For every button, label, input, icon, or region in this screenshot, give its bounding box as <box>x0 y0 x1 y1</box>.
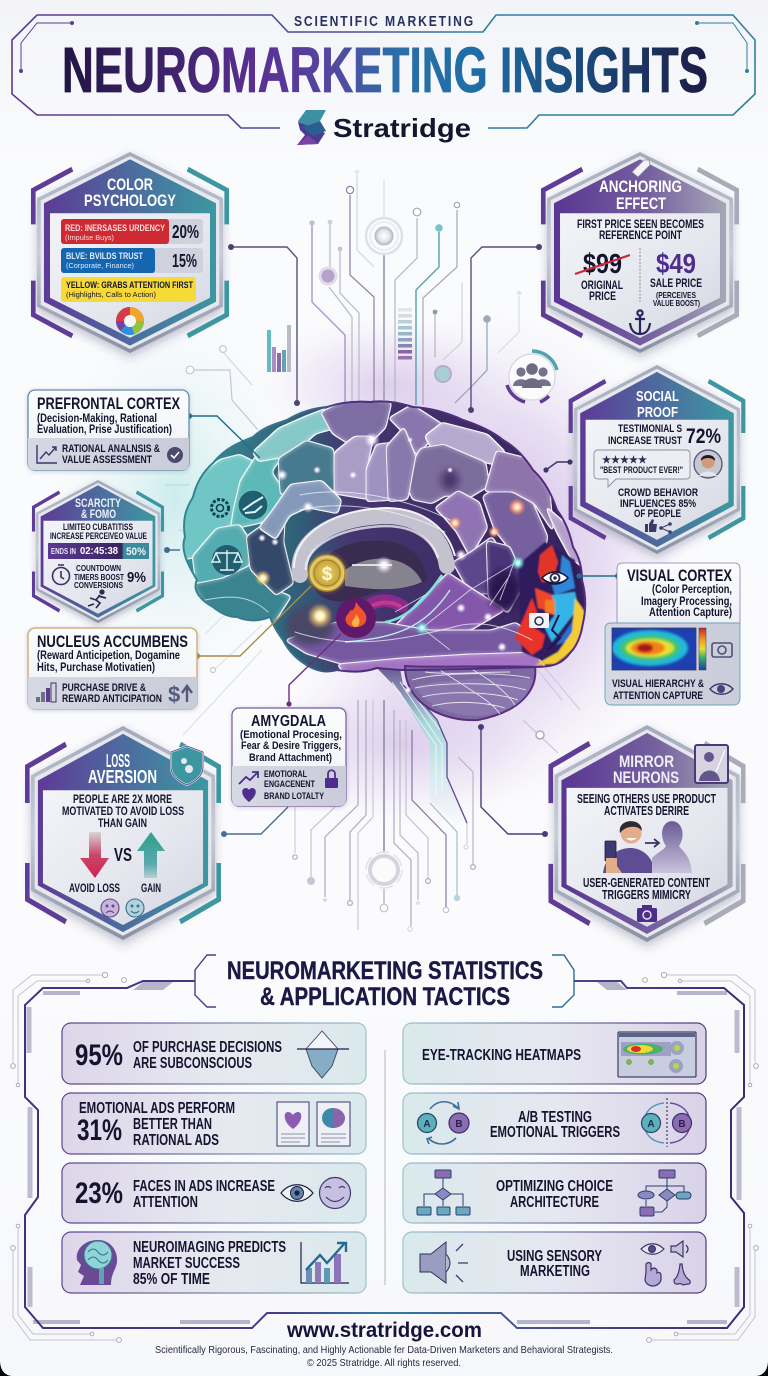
description: (Color Perception, <box>652 584 732 596</box>
eyebrow: SCIENTIFIC MARKETING <box>294 14 475 30</box>
summary: LIMITEO CUBATITISS <box>63 522 133 532</box>
row: 95 percent <box>62 1023 366 1084</box>
stat: blue: BLVE: BVILDS TRUST <box>66 251 143 262</box>
row: choice architecture <box>403 1163 706 1223</box>
stat: testimonials: TESTIMONIAL S <box>618 423 682 435</box>
icon: shield <box>171 746 203 785</box>
panel: prefrontal cortex <box>28 390 189 470</box>
icon: camera <box>529 613 549 628</box>
icon: check <box>167 447 183 463</box>
icon: a/b split: A <box>647 1119 655 1130</box>
stat: 9 percent: 9% <box>127 569 146 586</box>
heading: NEURONS <box>613 768 679 787</box>
icon: head with brain <box>77 1240 117 1285</box>
corpus callosum <box>294 508 455 601</box>
heading: PSYCHOLOGY <box>84 191 177 210</box>
icon: dollar up: $ <box>168 682 180 707</box>
logo: Stratridge <box>333 113 471 143</box>
row: a/b testing: A/B TESTING <box>518 1109 592 1126</box>
row: choice architecture: OPTIMIZING CHOICE <box>496 1178 613 1195</box>
brain folds and lobes <box>178 398 588 678</box>
row: sensory marketing: USING SENSORY <box>507 1248 602 1265</box>
summary lower: TRIGGERS MIMICRY <box>602 888 691 902</box>
summary: MOTIVATED TO AVOID LOSS <box>62 804 184 818</box>
summary <box>50 522 147 541</box>
band label: RATIONAL ANALNSIS & <box>62 443 160 455</box>
dark sulcus glows <box>286 470 520 645</box>
stat: red: 20% <box>172 222 199 242</box>
central glow <box>50 310 690 825</box>
panel: color psychology <box>33 152 227 353</box>
icon: handshake <box>238 490 268 520</box>
icon: price tag <box>632 160 650 177</box>
row: 23 percent: ATTENTION <box>133 1194 198 1211</box>
icon: camera lens <box>712 643 732 657</box>
heading: PROOF <box>637 405 678 421</box>
band label <box>62 443 160 466</box>
band label: EMOTIORAL <box>264 769 307 780</box>
band label <box>62 682 162 705</box>
stat: yellow: (Highlights, Calls to Action) <box>66 290 156 299</box>
connector: visual cortex <box>576 573 621 579</box>
connector: anchoring effect <box>468 244 542 413</box>
description <box>240 729 342 764</box>
icon: dollar coin: $ <box>322 564 333 585</box>
review bubble <box>594 450 690 487</box>
row: neuroimaging <box>62 1232 366 1293</box>
icon: sad face <box>101 899 119 917</box>
stat: yellow <box>61 277 196 302</box>
band label: ATTENTION CAPTURE <box>613 690 703 702</box>
sale price: SALE PRICE <box>650 276 702 290</box>
icon: a/b cycle <box>418 1102 469 1144</box>
row: a/b testing <box>403 1093 706 1154</box>
heatmap chart <box>612 628 706 670</box>
description: Evaluation, Prise Justification) <box>37 422 172 436</box>
icon: heart ad <box>277 1102 309 1146</box>
purple upper lobes <box>320 398 588 614</box>
original price: $99 <box>583 248 622 279</box>
band label: VALUE ASSESSMENT <box>62 454 152 466</box>
heading <box>84 175 177 210</box>
brain outline <box>183 401 585 672</box>
stat: blue: 15% <box>172 251 197 271</box>
panel: amygdala <box>232 708 346 806</box>
tagline: Scientifically Rigorous, Fascinating, and Highly Actionable fer Data-Driven Marketers and Behavioral Strategists. <box>155 1344 613 1356</box>
panel: mirror neurons <box>551 725 743 942</box>
connector: mirror neurons <box>478 724 548 837</box>
original price: ORIGINAL <box>581 278 623 292</box>
icon: a/b split <box>642 1098 692 1147</box>
icon: eye <box>281 1185 313 1201</box>
heading: ANCHORING <box>599 177 682 196</box>
summary <box>62 792 184 830</box>
section heading: & APPLICATION TACTICS <box>260 983 510 1011</box>
summary: PEOPLE ARE 2X MORE <box>73 792 172 806</box>
sale price <box>650 248 702 308</box>
summary <box>577 217 704 242</box>
icon: trend chart <box>37 445 57 463</box>
brain base <box>183 401 585 672</box>
website: www.stratridge.com <box>286 1319 482 1342</box>
description: Attention Capture) <box>649 607 732 619</box>
stat: yellow: YELLOW: GRABS ATTENTION FIRST <box>66 280 193 291</box>
heading <box>636 389 679 421</box>
panel: scarcity and fomo <box>34 480 162 623</box>
heading: AMYGDALA <box>251 713 326 730</box>
icon: gear <box>212 500 228 516</box>
icon: eye <box>710 684 733 694</box>
sale price: $49 <box>656 248 696 279</box>
row: eye-tracking <box>403 1023 706 1084</box>
row: 23 percent: FACES IN ADS INCREASE <box>133 1178 275 1195</box>
icon: camera <box>637 905 657 922</box>
row: sensory marketing: MARKETING <box>520 1263 590 1280</box>
icon: growth chart <box>301 1242 349 1283</box>
icon: lock <box>325 770 338 788</box>
stat: crowd behavior: CROWD BEHAVIOR <box>618 487 698 499</box>
description: Fear & Desire Triggers, <box>241 740 341 752</box>
connector: nucleus accumbens <box>194 586 311 659</box>
circuit traces above brain <box>309 170 521 405</box>
stat: blue: (Corporate, Finance) <box>66 261 134 270</box>
summary: FIRST PRICE SEEN BECOMES <box>577 217 704 231</box>
icon: dollar coin <box>304 550 350 596</box>
stat: red <box>61 219 203 244</box>
gyri lines <box>205 492 532 642</box>
footer <box>155 1319 613 1369</box>
summary: INCREASE PERCEIVEO VALUE <box>50 531 147 541</box>
neural sparks <box>255 432 526 694</box>
sale price: VALUE BOOST) <box>653 298 700 308</box>
icon: a/b split: B <box>678 1119 686 1130</box>
row: 23 percent <box>62 1163 366 1223</box>
left upper decorative traces <box>165 346 262 735</box>
countdown bar: 02:45:38 <box>80 545 118 557</box>
heading <box>599 177 682 213</box>
icon: decision tree <box>638 1170 691 1216</box>
description: (Emotional Procesing, <box>240 729 342 741</box>
heading: MIRROR <box>619 752 674 771</box>
description: Imagery Processing, <box>641 596 732 608</box>
stat: crowd behavior: INFLUENCES 85% <box>620 498 696 510</box>
stacked level bars <box>398 308 412 360</box>
heading: VISUAL CORTEX <box>627 566 733 585</box>
stat: red: (Impulse Buys) <box>65 233 114 242</box>
icon: anchor <box>630 310 650 334</box>
description <box>37 648 180 674</box>
teal frontal lobes <box>178 408 342 624</box>
row: neuroimaging: MARKET SUCCESS <box>133 1255 240 1272</box>
row: 31 percent: 31% <box>77 1114 122 1147</box>
review bubble: "BEST PRODUCT EVER!" <box>600 465 683 475</box>
labels: GAIN <box>141 883 161 895</box>
icon: dollar up <box>168 682 192 707</box>
copyright: © 2025 Stratridge. All rights reserved. <box>307 1357 461 1369</box>
heading <box>88 751 157 787</box>
icon: central target ring <box>366 218 402 254</box>
icon: stopwatch <box>52 565 70 584</box>
band label <box>612 678 704 702</box>
connector: social proof <box>543 459 573 473</box>
icon: lower hub ring <box>366 852 402 888</box>
icon: brain ad <box>317 1102 350 1146</box>
cerebellum <box>405 666 535 720</box>
stat: red: RED: INERSASES URDENCY <box>65 223 166 234</box>
band label <box>264 769 324 802</box>
heading: SCARCITY <box>75 498 121 510</box>
countdown bar: 50% <box>126 546 146 558</box>
brain stem <box>377 668 467 823</box>
row: eye-tracking: EYE-TRACKING HEATMAPS <box>422 1047 581 1064</box>
stat: crowd behavior <box>618 487 698 520</box>
icons: like and share <box>645 519 672 534</box>
connector: color psychology <box>228 244 300 406</box>
row: 31 percent: RATIONAL ADS <box>133 1132 219 1149</box>
row: 95 percent: OF PURCHASE DECISIONS <box>133 1039 282 1056</box>
connector: loss aversion <box>221 807 288 837</box>
icon: scales <box>212 545 242 575</box>
connector: scarcity <box>164 547 180 553</box>
description: (Reward Anticipetion, Dogamine <box>37 648 180 662</box>
description: Brand Attachment) <box>249 752 332 764</box>
panel: loss aversion <box>27 726 219 940</box>
summary <box>577 792 716 818</box>
icon: rising bars <box>36 683 56 702</box>
illustration: person with phone <box>603 821 655 873</box>
summary: ACTIVATES DERIRE <box>604 804 689 818</box>
summary lower: USER-GENERATED CONTENT <box>583 876 710 890</box>
logo <box>297 110 471 145</box>
brain illustration <box>178 398 588 720</box>
row: choice architecture: ARCHITECTURE <box>510 1194 599 1211</box>
icon: audience ring <box>507 351 557 402</box>
description: (Decision-Making, Rational <box>37 411 157 425</box>
panel: visual cortex <box>605 563 740 705</box>
row: 95 percent: 95% <box>75 1039 123 1072</box>
stat: crowd behavior: OF PEOPLE <box>634 508 681 520</box>
icon: flame amygdala <box>336 598 376 638</box>
stat: blue <box>61 248 203 273</box>
labels: AVOID LOSS <box>69 883 120 895</box>
connector: prefrontal cortex <box>186 413 260 458</box>
heading: AVERSION <box>88 767 157 787</box>
icon: a/b cycle: B <box>455 1119 463 1130</box>
illustration: mirrored silhouette <box>652 821 692 873</box>
band label: REWARD ANTICIPATION <box>62 693 162 705</box>
icon: happy face <box>126 899 144 917</box>
heading: PREFRONTAL CORTEX <box>37 394 180 413</box>
icon: transfer arrow <box>645 839 659 847</box>
arrow: gain <box>137 832 165 878</box>
heading <box>75 498 121 521</box>
stat: countdown timers: TIMERS BOOST <box>74 572 125 582</box>
countdown bar <box>48 543 149 559</box>
summary: THAN GAIN <box>98 816 147 830</box>
band label: ENGACENENT <box>264 779 315 790</box>
row: 31 percent <box>62 1093 366 1154</box>
row: 31 percent: BETTER THAN <box>133 1116 212 1133</box>
description <box>641 584 732 619</box>
stat: testimonials: 72% <box>686 425 721 448</box>
band label: PURCHASE DRIVE & <box>62 682 146 694</box>
heading: EFFECT <box>616 194 666 213</box>
row: a/b testing: EMOTIONAL TRIGGERS <box>490 1124 620 1141</box>
heading: SOCIAL <box>636 389 679 405</box>
icon: smile <box>320 1178 350 1208</box>
original price: PRICE <box>589 289 616 303</box>
summary: REFERENCE POINT <box>599 228 682 242</box>
countdown bar: ENDS IN <box>51 546 76 556</box>
circuit traces below brain <box>293 667 580 931</box>
icon: flowchart <box>417 1170 470 1215</box>
icon: colour wheel <box>120 311 140 331</box>
sale price: (PERCEIVES <box>656 290 696 300</box>
row: neuroimaging: 85% OF TIME <box>133 1271 210 1288</box>
heading: COLOR <box>107 175 153 194</box>
icon: eye <box>541 571 569 585</box>
review bubble: ★★★★★ <box>602 455 647 466</box>
row: sensory marketing <box>403 1232 706 1293</box>
section heading: NEUROMARKETING STATISTICS <box>227 957 543 985</box>
icon: heart <box>242 788 256 802</box>
stat: testimonials <box>608 423 721 448</box>
section: statistics and tactics <box>11 955 758 1342</box>
description <box>37 411 172 436</box>
section frame <box>11 955 758 1342</box>
limbic ribbon <box>345 575 470 650</box>
icons: senses <box>641 1241 690 1286</box>
panel: anchoring effect <box>543 152 737 353</box>
description: Hits, Purchase Motivatien) <box>37 660 155 674</box>
row: 95 percent: ARE SUBCONSCIOUS <box>133 1055 252 1072</box>
heading <box>613 752 679 787</box>
icon: rising arrow <box>239 772 258 784</box>
stat: testimonials: INCREASE TRUST <box>608 435 682 447</box>
icon: portrait frame <box>695 745 728 783</box>
panel: nucleus accumbens <box>28 628 197 709</box>
connector: amygdala <box>286 634 341 707</box>
row: 23 percent: 23% <box>75 1177 123 1210</box>
header banner <box>12 14 755 145</box>
stat: countdown timers: CONVERSIONS <box>74 580 123 590</box>
heading: & FOMO <box>81 509 116 521</box>
arrow: avoid loss <box>80 832 109 878</box>
icon: heatmap screen <box>618 1032 696 1077</box>
avatar <box>694 450 722 478</box>
icon: speaker <box>420 1242 468 1283</box>
lower temporal bands <box>284 572 550 678</box>
summary lower <box>583 876 710 902</box>
stat: countdown timers: COUNTDOWN <box>76 563 121 573</box>
icon: running figure <box>88 590 106 608</box>
band label: VISUAL HIERARCHY & <box>612 678 704 690</box>
icon: a/b cycle: A <box>423 1119 431 1130</box>
row: 31 percent: EMOTIONAL ADS PERFORM <box>79 1100 235 1117</box>
stat: countdown timers <box>74 563 125 590</box>
heading: NUCLEUS ACCUMBENS <box>37 632 188 651</box>
original price <box>575 248 630 303</box>
band label: BRAND LOTALTY <box>264 791 324 802</box>
occipital colour map <box>515 542 585 668</box>
heading: LOSS <box>106 751 130 771</box>
icon: iceberg <box>297 1031 349 1078</box>
section heading <box>227 957 543 1011</box>
mini bar chart <box>267 325 291 372</box>
label: versus: VS <box>114 845 132 865</box>
row: neuroimaging: NEUROIMAGING PREDICTS <box>133 1239 286 1256</box>
panel: social proof <box>571 365 743 554</box>
